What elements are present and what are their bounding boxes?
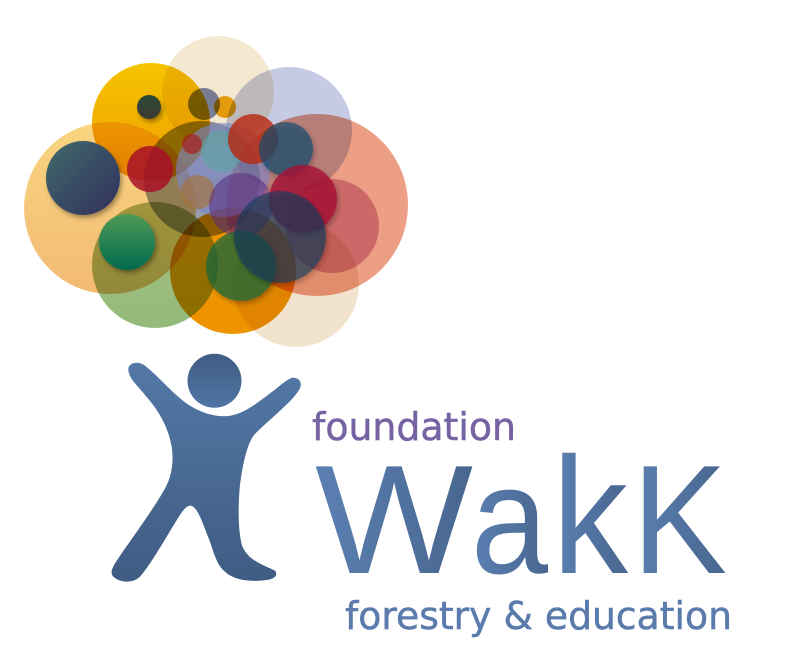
wordmark: WakK: K bbox=[632, 433, 727, 606]
body bbox=[112, 363, 301, 582]
wordmark: WakK: W bbox=[315, 433, 473, 606]
small circles bbox=[46, 88, 337, 301]
wordmark: WakK: k bbox=[552, 424, 629, 609]
head bbox=[188, 354, 242, 408]
text: foundation: foundation bbox=[312, 405, 516, 449]
wordmark: WakK bbox=[315, 424, 727, 609]
text: forestry & education: forestry & education bbox=[345, 594, 732, 638]
icon: person bbox=[112, 354, 301, 582]
large circles bbox=[24, 36, 408, 347]
bubble cloud bbox=[24, 36, 408, 347]
wordmark: WakK: a bbox=[471, 433, 549, 606]
